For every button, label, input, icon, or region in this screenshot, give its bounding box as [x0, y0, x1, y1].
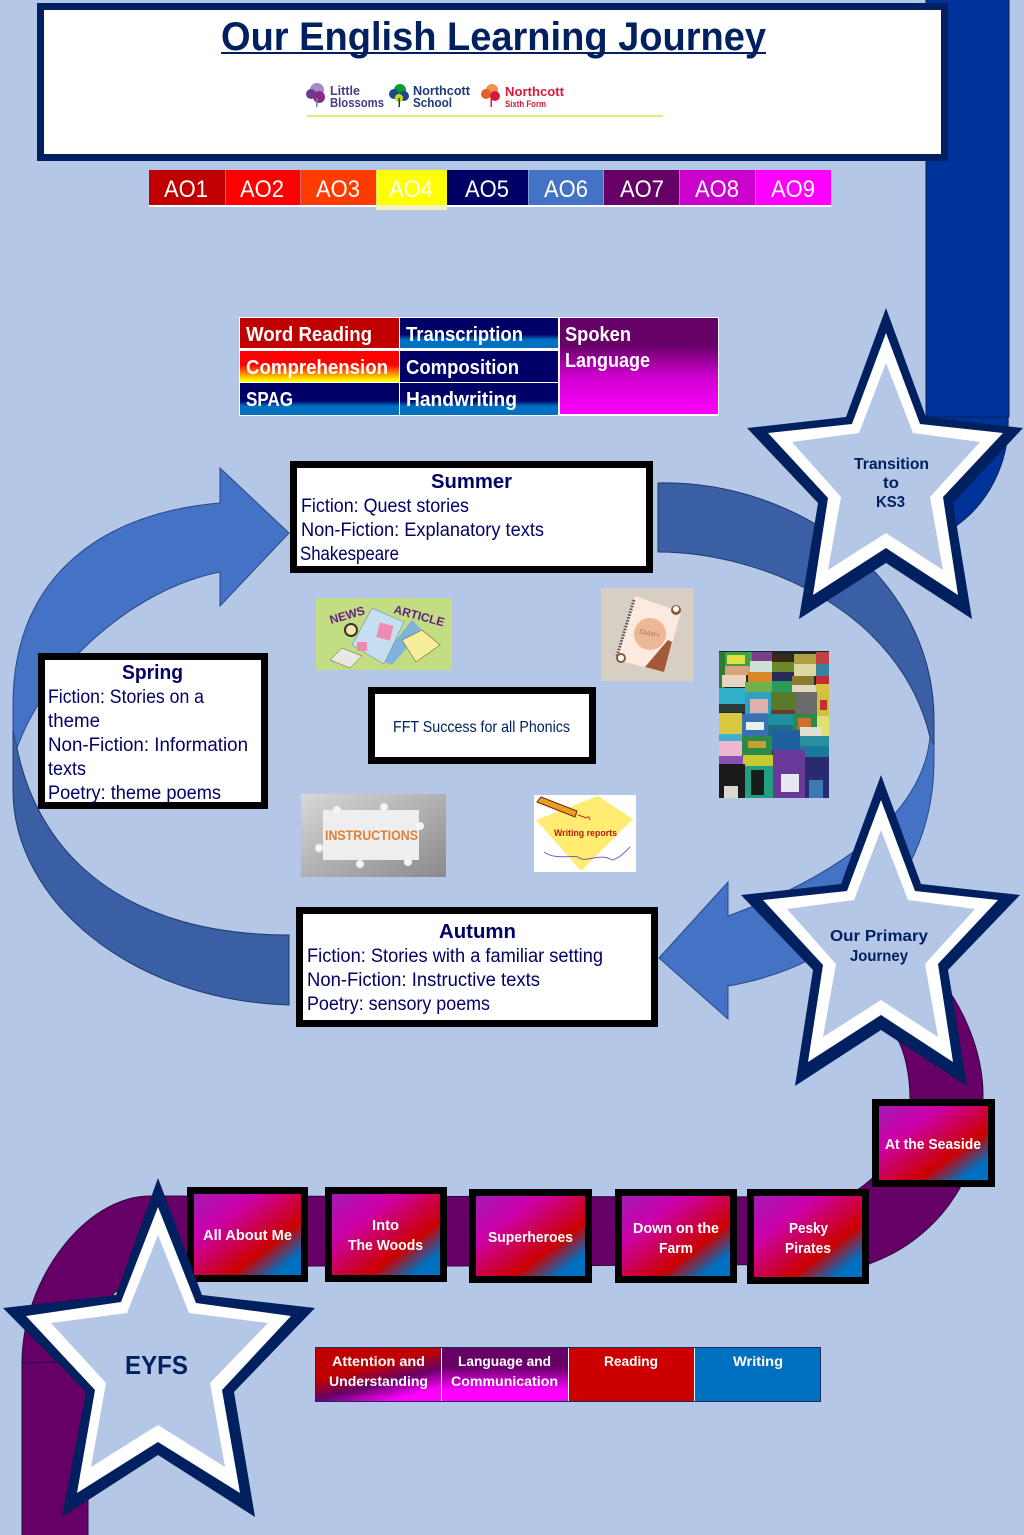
assessment objectives bar: AO4 — [389, 176, 433, 203]
theme card: into the woods: The Woods — [348, 1237, 423, 1254]
spring panel: texts — [48, 759, 86, 780]
assessment objectives bar — [149, 170, 831, 210]
assessment objectives bar: AO8 — [695, 176, 739, 203]
national curriculum strands table — [239, 317, 719, 416]
phonics panel: FFT Success for all Phonics — [393, 719, 570, 736]
assessment objectives bar: AO2 — [240, 176, 284, 203]
national curriculum strands table: Language — [565, 350, 650, 372]
image: news article: NEWS — [328, 604, 366, 627]
phonics panel — [372, 690, 592, 760]
EYFS strands table: Understanding — [329, 1373, 428, 1389]
image: writing reports — [534, 795, 636, 872]
EYFS strands table: Writing — [733, 1353, 783, 1369]
assessment objectives bar: AO9 — [771, 176, 815, 203]
star: EYFS: EYFS — [125, 1350, 188, 1380]
theme card: pesky pirates: Pesky — [789, 1220, 829, 1237]
spring panel: Spring — [122, 662, 183, 684]
theme card: at the seaside: At the Seaside — [885, 1136, 981, 1153]
autumn panel: Fiction: Stories with a familiar setting — [307, 946, 603, 967]
image: pile of books — [719, 651, 829, 798]
image: instructions puzzle — [301, 794, 446, 877]
curved arrow: autumn back to spring — [13, 705, 289, 1005]
theme card: pesky pirates — [750, 1192, 866, 1280]
assessment objectives bar: AO1 — [164, 176, 208, 203]
theme card: at the seaside — [876, 1102, 992, 1184]
spring panel: Non-Fiction: Information — [48, 735, 248, 756]
EYFS strands table: Communication — [451, 1373, 558, 1389]
star: our primary journey: Journey — [850, 948, 908, 965]
national curriculum strands table: Spoken — [565, 324, 631, 346]
theme card: down on the farm: Down on the — [633, 1220, 719, 1237]
theme card: pesky pirates: Pirates — [785, 1240, 831, 1257]
star: transition to KS3 — [747, 308, 1023, 619]
theme card: down on the farm: Farm — [659, 1240, 693, 1257]
assessment objectives bar: AO6 — [544, 176, 588, 203]
summer panel: Fiction: Quest stories — [301, 496, 469, 517]
summer panel — [294, 464, 650, 570]
EYFS strands table: Attention and — [332, 1353, 425, 1369]
theme card: down on the farm — [618, 1192, 734, 1280]
autumn panel: Autumn — [439, 921, 516, 943]
spring panel — [42, 656, 264, 806]
purple journey path — [22, 985, 983, 1535]
image: instructions puzzle: INSTRUCTIONS — [325, 827, 418, 843]
curved arrow: summer to transition — [658, 483, 934, 745]
title: Our English Learning Journey — [221, 15, 767, 59]
curved arrow: primary journey to autumn — [659, 737, 934, 1019]
autumn panel: Non-Fiction: Instructive texts — [307, 970, 540, 991]
star: transition to KS3: Transition — [854, 456, 929, 473]
image: diary — [601, 588, 694, 681]
autumn panel — [300, 910, 654, 1024]
star: our primary journey: Our Primary — [830, 928, 928, 945]
school logos — [306, 83, 663, 117]
autumn panel: Poetry: sensory poems — [307, 994, 490, 1015]
school logos: Blossoms — [330, 96, 384, 110]
assessment objectives bar: AO5 — [465, 176, 509, 203]
theme card: all about me: All About Me — [203, 1227, 292, 1244]
spring panel: theme — [48, 711, 100, 732]
theme card: superheroes: Superheroes — [488, 1229, 573, 1246]
school logos: Northcott — [413, 84, 471, 98]
curved arrow: spring to summer — [13, 468, 289, 748]
theme card: superheroes — [472, 1192, 588, 1280]
national curriculum strands table: Composition — [406, 357, 519, 379]
image: diary: DIARY — [638, 628, 661, 640]
national curriculum strands table: SPAG — [246, 389, 293, 411]
star: transition to KS3: KS3 — [876, 494, 905, 511]
spring panel: Poetry: theme poems — [48, 783, 221, 804]
EYFS strands table — [316, 1348, 820, 1402]
title panel — [40, 6, 944, 158]
theme card: into the woods — [328, 1190, 444, 1278]
national curriculum strands table: Word Reading — [246, 324, 372, 346]
assessment objectives bar: AO7 — [620, 176, 664, 203]
school logos: Sixth Form — [505, 99, 546, 109]
theme card: into the woods: Into — [372, 1217, 399, 1234]
star: transition to KS3: to — [883, 475, 899, 492]
summer panel: Shakespeare — [300, 544, 399, 565]
star: EYFS — [3, 1178, 315, 1517]
school logos: Northcott — [505, 85, 565, 99]
school logos: Little — [330, 84, 360, 98]
national curriculum strands table: Transcription — [406, 324, 523, 346]
EYFS strands table: Reading — [604, 1353, 658, 1369]
star: our primary journey — [741, 775, 1020, 1086]
EYFS strands table: Language and — [458, 1353, 551, 1369]
image: news article — [316, 598, 452, 670]
school logos: School — [413, 96, 452, 110]
spring panel: Fiction: Stories on a — [48, 687, 204, 708]
assessment objectives bar: AO3 — [316, 176, 360, 203]
summer panel: Summer — [431, 471, 512, 493]
summer panel: Non-Fiction: Explanatory texts — [301, 520, 544, 541]
image: news article: ARTICLE — [392, 602, 446, 629]
national curriculum strands table: Comprehension — [246, 357, 388, 379]
image: writing reports: Writing reports — [554, 828, 617, 839]
national curriculum strands table: Handwriting — [406, 389, 517, 411]
theme card: all about me — [190, 1190, 304, 1278]
blue path to top right — [920, 0, 1009, 530]
